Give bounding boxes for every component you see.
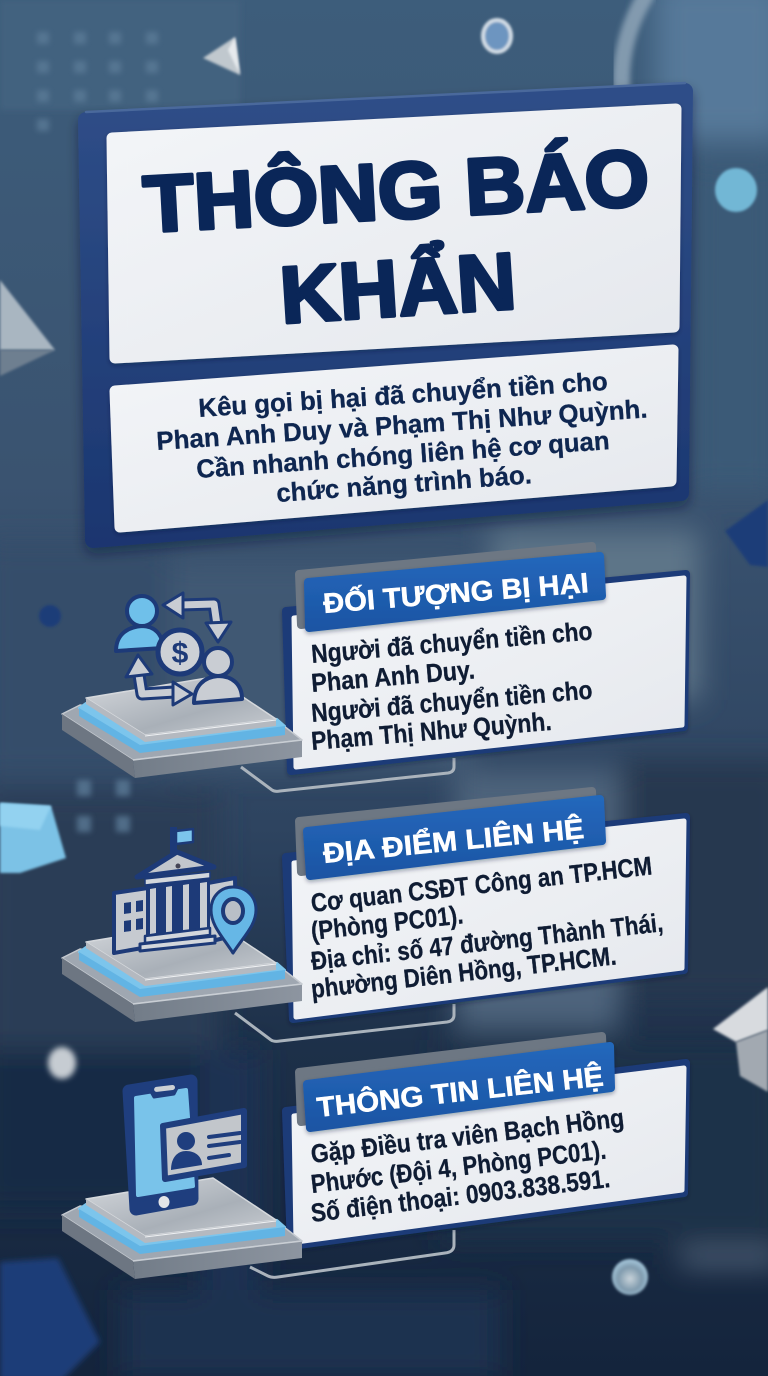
card heading: ĐỊA ĐIỂM LIÊN HỆ [322,813,585,869]
connector line [241,758,454,791]
card body text [309,851,665,1004]
subtitle card [115,350,673,527]
connector line [250,1230,454,1277]
platform 1 [62,677,302,778]
subtitle text [155,366,648,508]
title text [141,133,651,340]
card body text: Địa chỉ: số 47 đường Thành Thái, [309,907,665,976]
card body text: Phạm Thị Như Quỳnh. [310,706,553,756]
panel: main announcement [86,83,685,540]
title text: KHẨN [277,236,519,340]
card body text: phường Diên Hồng, TP.HCM. [309,940,618,1004]
section 2: dia diem lien he [62,791,686,1041]
card: dia diem lien he [286,791,686,1019]
card body text: Người đã chuyển tiền cho [310,674,594,728]
card: doi tuong bi hai [286,546,686,771]
card body text: Số điện thoại: 0903.838.591. [309,1163,612,1228]
card body text [310,615,594,756]
section 3: thong tin lien he [62,1036,686,1279]
subtitle text: chức năng trình báo. [275,459,533,508]
icon: money transfer between people: $ [172,637,189,670]
subtitle text: Cần nhanh chóng liên hệ cơ quan [195,425,610,484]
card body text [309,1102,626,1228]
title text: THÔNG BÁO [141,133,651,249]
card body text: Cơ quan CSĐT Công an TP.HCM [309,851,654,918]
card: thong tin lien he [286,1036,686,1246]
section 1: doi tuong bi hai [62,546,686,791]
icon: phone with ID card [129,1081,244,1209]
card body text: Phan Anh Duy. [310,654,476,698]
icon: government building with map pin [114,827,256,953]
card body text: (Phòng PC01). [309,899,465,946]
card heading: THÔNG TIN LIÊN HỆ [315,1060,605,1123]
card body text: Phước (Đội 4, Phòng PC01). [309,1135,608,1199]
card body text: Gặp Điều tra viên Bạch Hồng [309,1102,626,1169]
title card [112,109,676,358]
subtitle text: Kêu gọi bị hại đã chuyển tiền cho [197,366,608,423]
subtitle text: Phan Anh Duy và Phạm Thị Như Quỳnh. [155,393,648,456]
icon: money transfer between people [116,593,242,705]
card body text: Người đã chuyển tiền cho [310,615,594,669]
connector line [235,1004,454,1041]
platform 3 [62,1178,302,1279]
platform 2 [62,921,302,1022]
card heading: ĐỐI TƯỢNG BỊ HẠI [322,566,590,619]
